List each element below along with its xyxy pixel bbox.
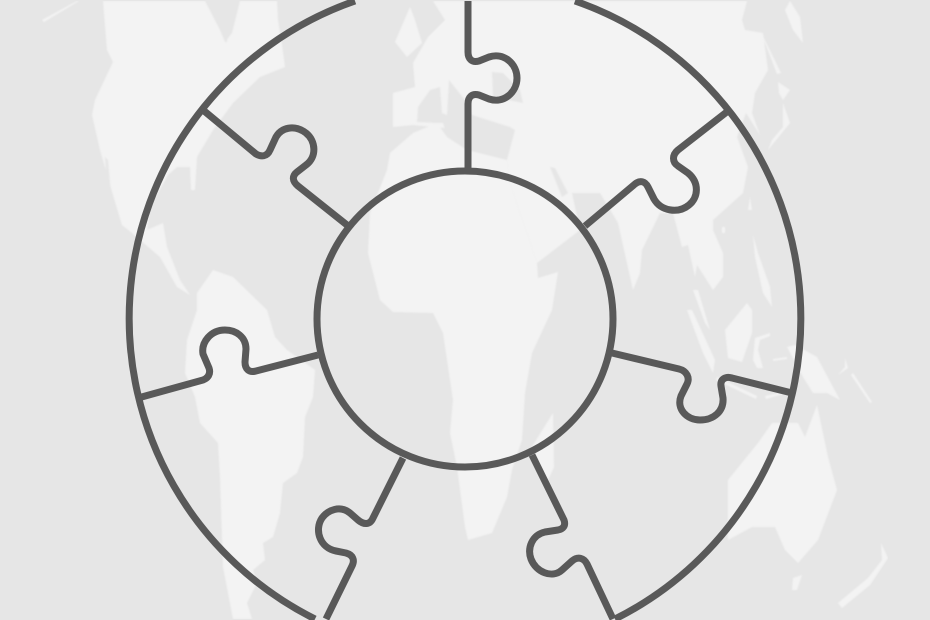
outer ring right arc [575, 1, 801, 619]
Taiwan [748, 197, 752, 210]
Java [716, 377, 757, 399]
Aleutians [42, 1, 79, 22]
connector: upper left [203, 110, 347, 225]
Bismarck [838, 358, 848, 375]
Lesser Sunda [765, 392, 783, 399]
connector: left [138, 330, 318, 398]
Eurasia [393, 1, 768, 290]
Africa [368, 123, 558, 540]
Kamchatka [785, 1, 803, 43]
Solomon Islands [851, 373, 872, 403]
connector: top [468, 1, 517, 169]
center circle [317, 171, 613, 467]
outer ring left arc [129, 1, 355, 619]
Britain [395, 7, 422, 57]
Hokkaido [778, 82, 790, 100]
Mediterranean [417, 80, 515, 160]
Gulf of California [105, 157, 112, 205]
South America [185, 270, 315, 619]
Borneo [725, 303, 752, 362]
connector: bottom left [318, 458, 403, 619]
New Zealand [838, 543, 888, 608]
Malay peninsula [693, 290, 710, 330]
Black Sea [492, 72, 523, 103]
Hainan [722, 227, 725, 233]
Moluccas [773, 357, 787, 361]
Honshu [768, 103, 790, 150]
New Guinea [787, 345, 840, 400]
North America [92, 1, 285, 295]
seas [105, 28, 568, 205]
Sulawesi [753, 333, 770, 368]
Hudson lakes [222, 28, 228, 42]
connector: lower right [612, 353, 792, 420]
Madagascar [530, 413, 554, 487]
Australia [728, 405, 837, 563]
Sumatra [687, 310, 715, 373]
connector: upper right [585, 111, 728, 226]
Philippines [753, 235, 772, 307]
Persian Gulf [550, 167, 568, 197]
puzzle outline [129, 1, 801, 619]
Sakhalin [760, 30, 781, 74]
connector: bottom right [530, 455, 613, 619]
Tasmania [792, 575, 802, 590]
